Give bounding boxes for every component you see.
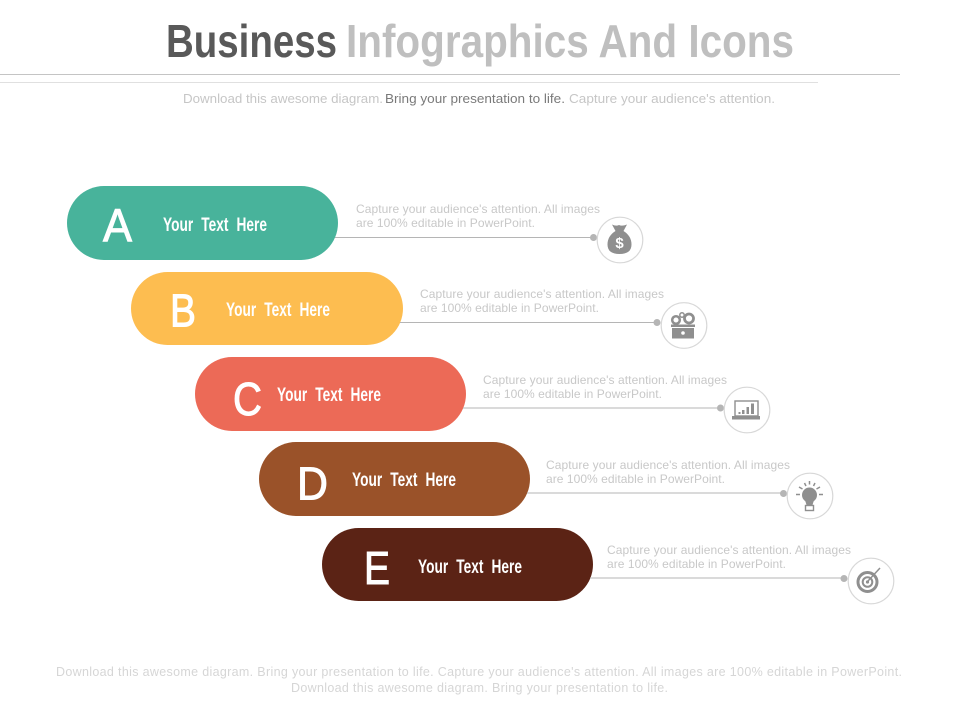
label A: Your Text Here [163,215,267,236]
title [166,15,794,67]
connector D [527,490,787,497]
letter B: B [170,284,196,336]
letter D: D [297,458,328,510]
pill B [131,272,403,345]
connector B [400,319,660,326]
label D: Your Text Here [352,470,456,491]
description C: are 100% editable in PowerPoint. [483,387,662,401]
title: Business [166,15,337,67]
pill C [195,357,466,431]
connector A [335,234,597,241]
label B: Your Text Here [226,300,330,321]
connector E [590,575,848,582]
pill D [259,442,530,516]
letter E: E [364,542,390,594]
icon: money bag: $ [615,235,624,252]
footer text [56,665,902,695]
step A [67,186,643,263]
icon: laptop chart [724,387,770,433]
description C: Capture your audience's attention. All images [483,373,727,387]
step B [131,272,707,348]
connector C [463,404,724,412]
subtitle: Bring your presentation to life. [385,92,565,106]
step E [322,528,894,604]
subtitle: Capture your audience's attention. [569,92,775,106]
subtitle [183,92,775,106]
footer text: Download this awesome diagram. Bring your presentation to life. [291,681,668,695]
description A: are 100% editable in PowerPoint. [356,216,535,230]
title: Infographics And Icons [346,15,794,67]
step D [259,442,833,519]
pill A [67,186,338,260]
label E: Your Text Here [418,557,522,578]
description D: are 100% editable in PowerPoint. [546,472,725,486]
step C [195,357,770,433]
icon: light bulb [787,473,833,519]
label C: Your Text Here [277,385,381,406]
footer text: Download this awesome diagram. Bring your presentation to life. Capture your audience's attention. All images are 100% editable in PowerPoint. [56,665,902,679]
description B: are 100% editable in PowerPoint. [420,301,599,315]
description D: Capture your audience's attention. All images [546,458,790,472]
subtitle: Download this awesome diagram. [183,92,383,106]
icon: money bag [597,217,643,263]
description B: Capture your audience's attention. All images [420,287,664,301]
description E: are 100% editable in PowerPoint. [607,557,786,571]
pill E [322,528,593,601]
description A: Capture your audience's attention. All images [356,202,600,216]
icon: gears and box [661,303,707,348]
icon: target [848,558,894,604]
letter C: C [233,373,262,425]
letter A: A [103,200,132,252]
description E: Capture your audience's attention. All images [607,543,851,557]
